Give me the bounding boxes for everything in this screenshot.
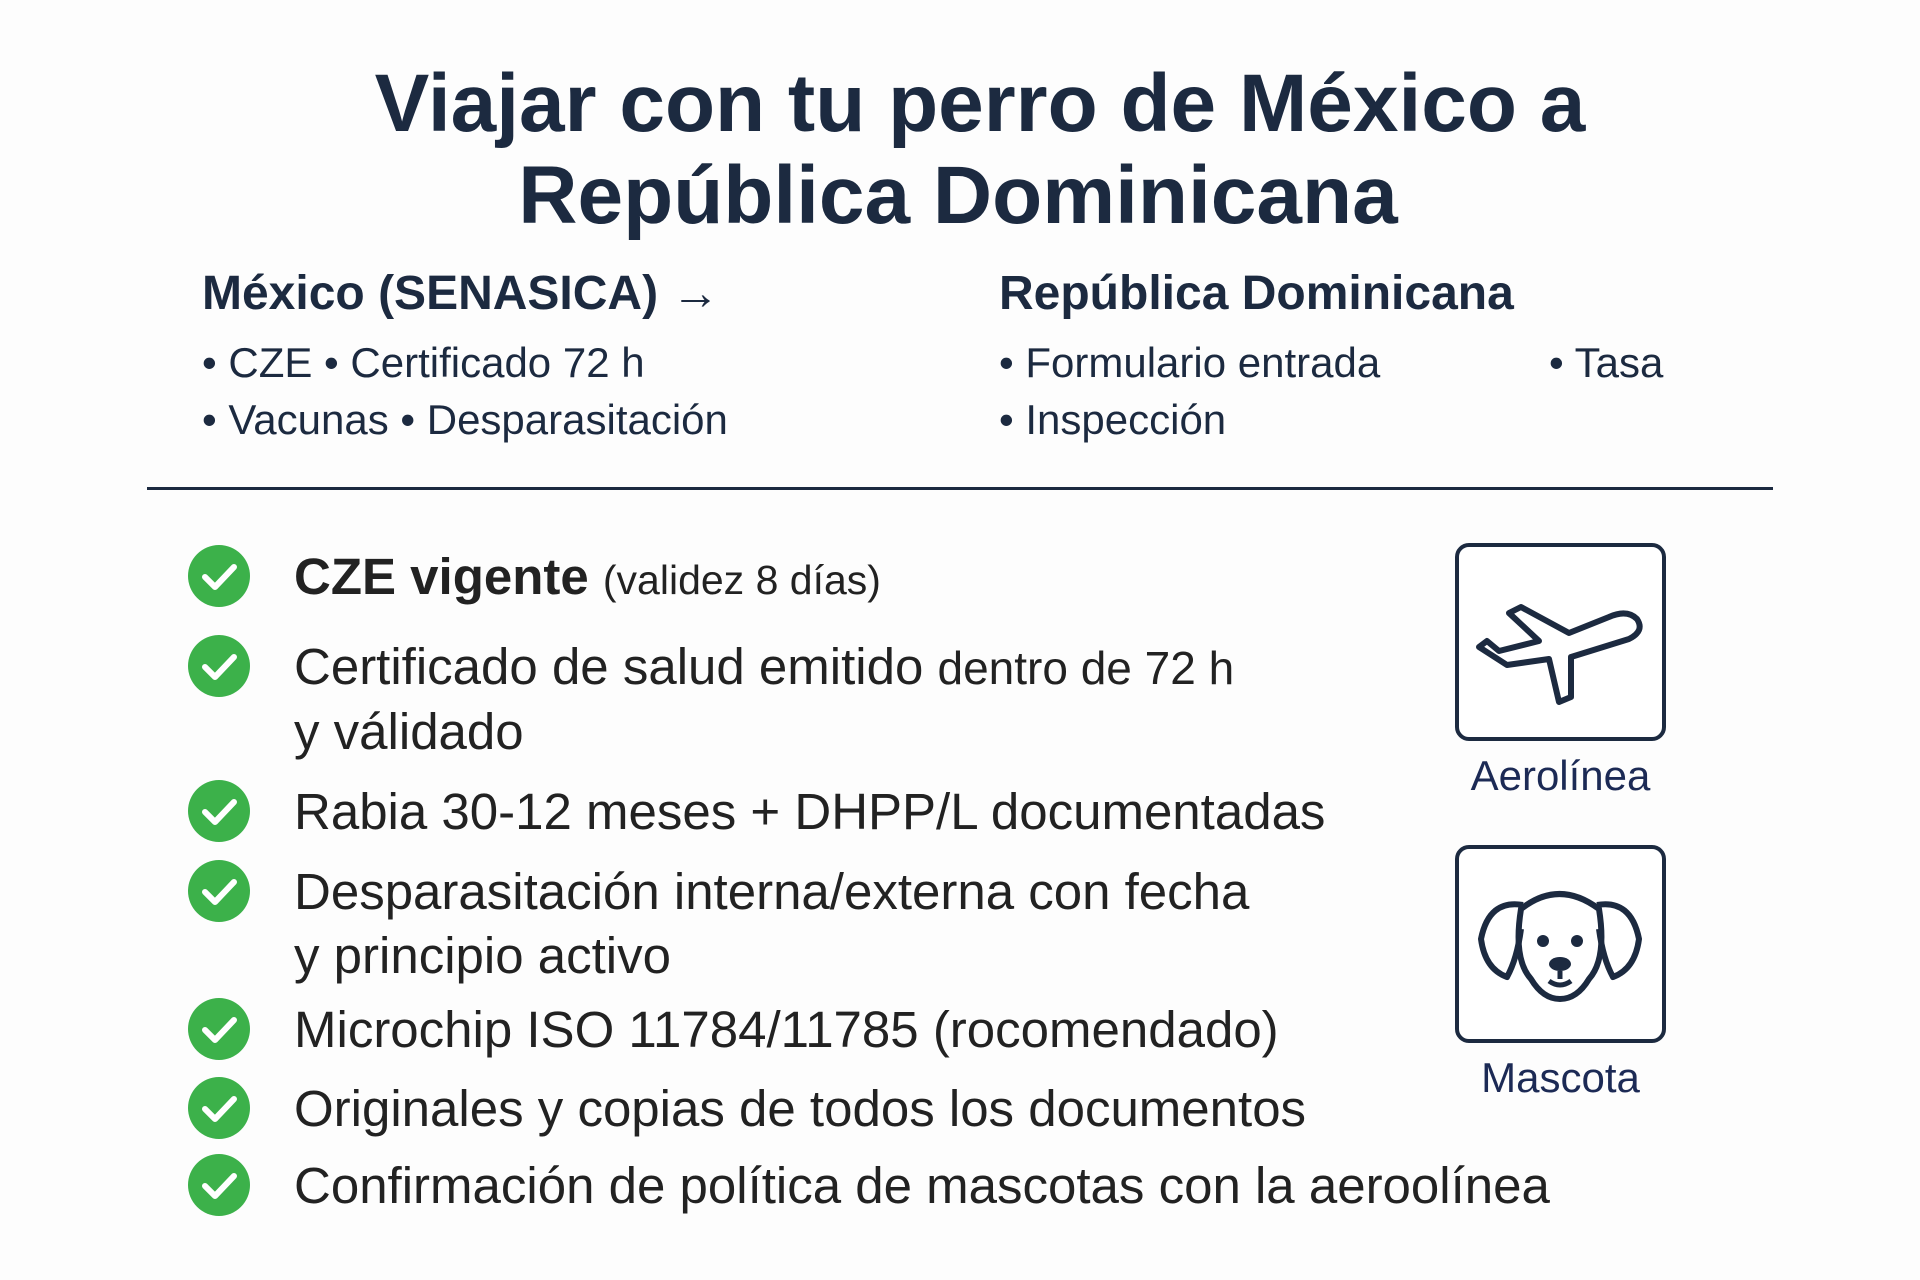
checklist item 4: Desparasitación interna/externa con fecha — [294, 863, 1249, 920]
bullets: Dominican Republic: • Formulario entrada — [999, 339, 1380, 386]
title — [375, 58, 1586, 241]
label: Aerolínea: Aerolínea — [1471, 752, 1650, 799]
icon: airplane — [1455, 543, 1666, 741]
label: Mascota: Mascota — [1481, 1054, 1640, 1101]
checklist item 5: Microchip ISO 11784/11785 (rocomendado) — [294, 1001, 1279, 1058]
checklist item 7: Confirmación de política de mascotas con la aeroolínea — [294, 1157, 1550, 1214]
title: Viajar con tu perro de México a — [375, 58, 1585, 149]
title: República Dominicana — [518, 150, 1398, 241]
bullets: Mexico — [202, 339, 728, 443]
checklist item 3: Rabia 30-12 meses + DHPP/L documentadas — [294, 783, 1325, 840]
bullet: Tasa: • Tasa — [1549, 339, 1663, 386]
bullets: Dominican Republic — [999, 339, 1380, 443]
checklist item 2: Certificado de salud emitido dentro de 72 h — [294, 638, 1234, 695]
heading: Dominican Republic: República Dominicana — [999, 267, 1514, 320]
checklist item 2: y válidado — [294, 703, 524, 760]
bullets: Mexico: • CZE • Certificado 72 h — [202, 339, 645, 386]
bullets: Mexico: • Vacunas • Desparasitación — [202, 396, 728, 443]
panel: Dominican Republic requirements — [999, 267, 1664, 443]
checklist item 1: CZE vigente (validez 8 días) — [294, 548, 881, 605]
bullets: Dominican Republic: • Inspección — [999, 396, 1226, 443]
panel: Mexico requirements — [202, 267, 728, 443]
icon: dog — [1455, 845, 1666, 1043]
checklist item 4: y principio activo — [294, 927, 671, 984]
checklist item 4 — [188, 860, 1250, 984]
checklist item 2 — [188, 635, 1234, 760]
heading: Mexico: México (SENASICA) → — [202, 267, 719, 320]
checklist item 6: Originales y copias de todos los documentos — [294, 1080, 1306, 1137]
